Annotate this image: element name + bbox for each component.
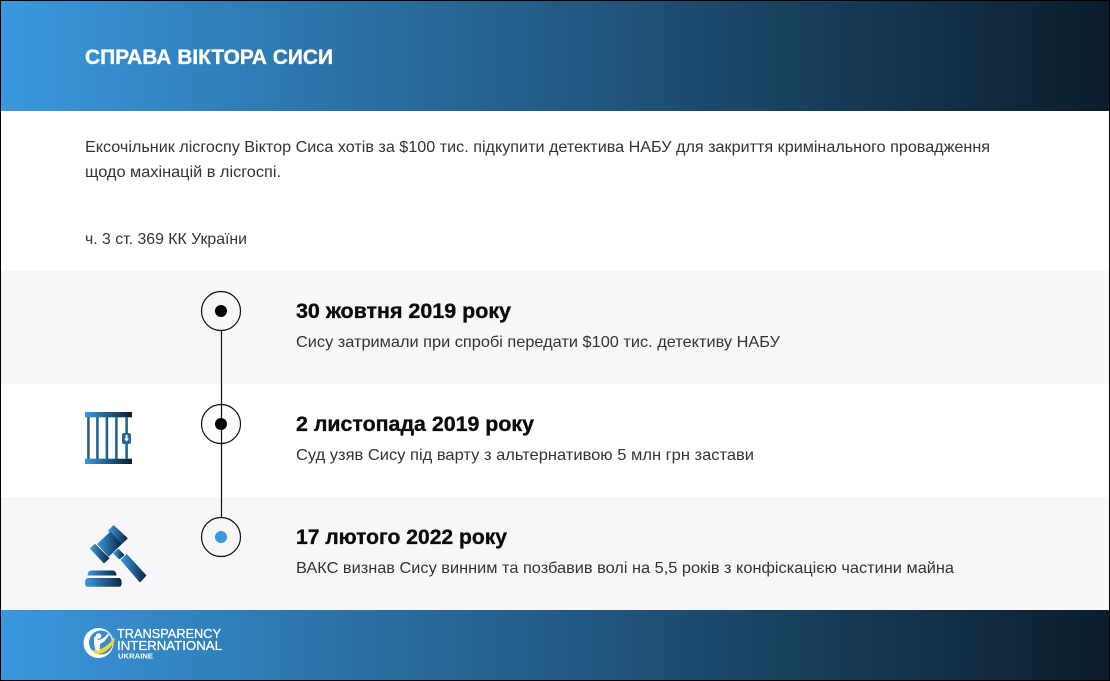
logo: Transparency International Ukraine: INTERNATIONAL	[117, 638, 222, 653]
timeline node 3	[202, 518, 240, 556]
intro text	[85, 139, 990, 181]
timeline	[202, 292, 240, 556]
event 3: ВАКС визнав Сису винним та позбавив волі на 5,5 років з конфіскацією частини майна	[296, 560, 954, 577]
header band	[0, 0, 1110, 111]
intro text: щодо махінацій в лісгоспі.	[85, 164, 281, 181]
timeline node 1	[202, 292, 240, 330]
footer band	[0, 610, 1110, 681]
timeline node 2	[202, 404, 240, 444]
logo: Transparency International Ukraine	[84, 626, 222, 660]
event 2: Суд узяв Сису під варту з альтернативою 5 млн грн застави	[296, 447, 754, 464]
event 2	[296, 413, 754, 464]
title: СПРАВА ВІКТОРА СИСИ	[85, 46, 333, 69]
intro text: Ексочільник лісгоспу Віктор Сиса хотів за $100 тис. підкупити детектива НАБУ для закриття кримінального провадження	[85, 139, 990, 156]
icon: gavel	[85, 526, 146, 587]
logo: Transparency International Ukraine: UKRAINE	[118, 654, 153, 660]
logo: Transparency International Ukraine: TRANSPARENCY	[117, 626, 221, 641]
event 2: 2 листопада 2019 року	[296, 413, 534, 436]
legal article: ч. 3 ст. 369 КК України	[85, 231, 247, 248]
event 3	[296, 526, 954, 577]
row background: 17 February 2022	[0, 497, 1110, 610]
event 1: Сису затримали при спробі передати $100 тис. детективу НАБУ	[296, 334, 781, 351]
row background: 30 October 2019	[0, 271, 1110, 384]
icon: prison bars	[85, 412, 132, 464]
event 3: 17 лютого 2022 року	[296, 526, 507, 549]
event 1	[296, 300, 781, 351]
event 1: 30 жовтня 2019 року	[296, 300, 511, 323]
